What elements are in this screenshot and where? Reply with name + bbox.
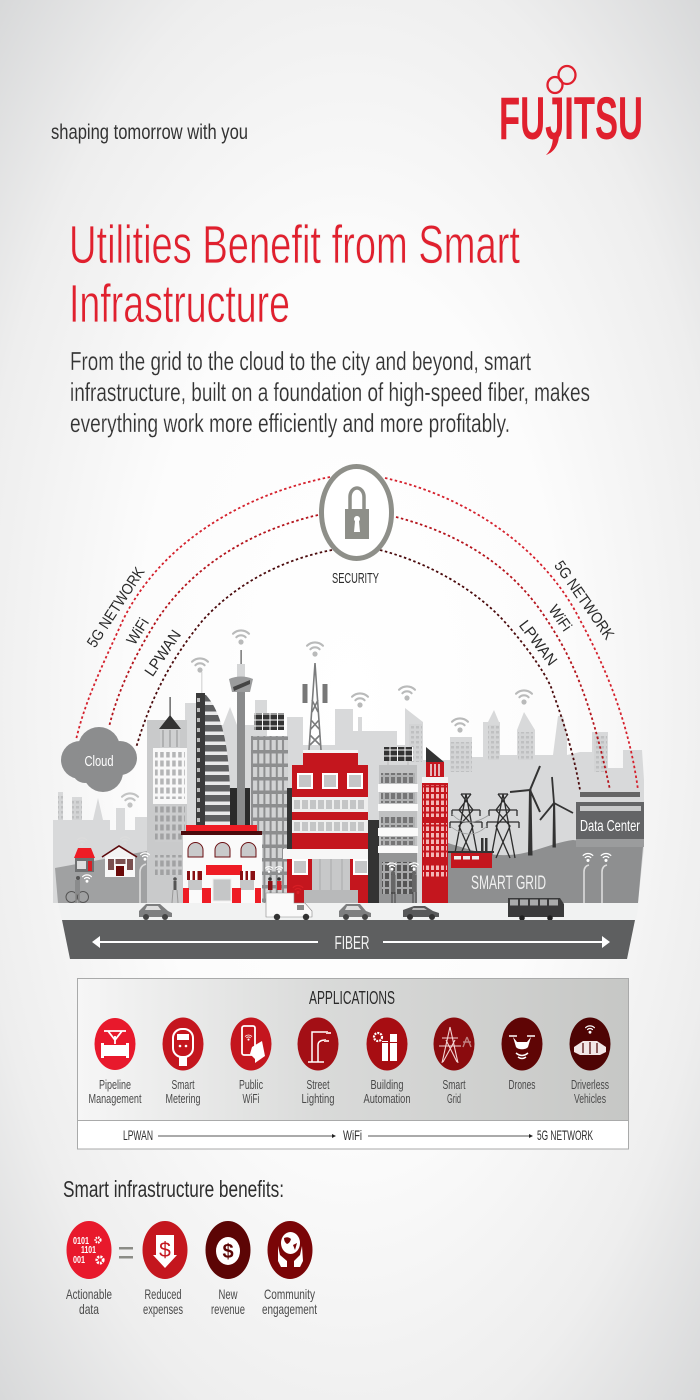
solar panel roof [254,713,284,730]
arc labels [84,558,617,680]
arc labels: WiFi [545,602,575,635]
balcony building [378,747,418,903]
application: public wifi: WiFi [242,1091,260,1106]
white house [102,846,137,877]
application: pipeline management: Management [88,1091,142,1106]
wind turbines [510,766,573,855]
benefit: reduced expenses: $ [159,1239,171,1262]
LPWAN arc left [136,550,332,748]
benefit: new revenue: revenue [211,1301,245,1317]
title: Infrastructure [69,274,290,334]
benefit: new revenue: New [218,1286,238,1302]
application: smart grid: Smart [442,1077,466,1092]
dark pillar beside red building [287,788,293,858]
logo J tail [546,134,559,155]
red building [283,750,377,903]
van [266,893,312,920]
benefit: community engagement: engagement [262,1301,317,1317]
network progression scale [123,1127,593,1143]
benefit: new revenue: $ [222,1241,234,1263]
benefit: new revenue [206,1221,250,1317]
dark strip [368,820,380,903]
vehicles [139,893,564,921]
benefit: actionable data: Actionable [66,1286,112,1302]
street lamps [140,864,607,903]
smart grid label: SMART GRID [471,873,546,894]
benefit: actionable data [66,1221,112,1317]
application: drones: Drones [508,1077,536,1092]
benefit: reduced expenses [142,1221,188,1317]
application: driverless vehicles: Vehicles [574,1091,606,1106]
panel: applications [78,978,628,1149]
benefit: actionable data: 001 [73,1255,85,1266]
cloud label: Cloud [84,753,114,770]
distant windows [58,724,607,820]
logo infinity mark [548,66,576,93]
benefit: actionable data: data [79,1301,99,1317]
benefit: actionable data: 1101 [81,1245,96,1256]
fiber right arrow [383,936,610,948]
application: smart grid [434,1018,474,1106]
wifi signals [78,630,611,894]
benefit: reduced expenses: Reduced [144,1286,182,1302]
arc labels: 5G NETWORK [84,564,149,651]
application: pipeline management [88,1018,142,1106]
upper windows [298,774,362,788]
network progression scale: LPWAN [123,1127,153,1143]
application: pipeline management: Pipeline [99,1077,131,1092]
curved skyscraper [196,672,250,825]
data center label: Data Center [580,818,640,835]
pedestrians [172,871,416,903]
tall red tower [422,747,448,903]
left hill [55,850,153,903]
5G arc left [76,477,330,740]
car [139,904,172,920]
network progression scale: WiFi [343,1127,362,1143]
intro paragraph: everything work more efficiently and more profitably. [70,408,510,438]
arc labels: LPWAN [142,627,185,680]
Fujitsu logo [499,66,643,155]
application: smart metering [162,1018,204,1106]
benefit: community engagement [262,1221,317,1317]
application: smart grid: Grid [447,1091,461,1106]
application: building automation [364,1018,410,1106]
applications heading: APPLICATIONS [309,988,395,1008]
observation tower [229,650,253,825]
application: public wifi [230,1018,272,1106]
benefit: actionable data: 0101 [73,1236,89,1247]
arc labels: 5G NETWORK [550,558,617,643]
fiber bar [62,920,635,959]
equals sign [119,1247,133,1258]
security badge [322,466,392,587]
arc labels: WiFi [124,615,153,648]
white ledge [283,849,377,859]
application: street lighting [298,1018,338,1106]
application: smart metering: Smart [172,1077,195,1092]
white shop [181,825,262,903]
benefit: community engagement: Community [264,1286,315,1302]
application: driverless vehicles: Driverless [571,1077,609,1092]
arc labels: LPWAN [515,617,560,669]
network arcs [76,477,638,790]
grey tower behind white building [147,720,187,903]
LPWAN arc right [380,550,580,790]
intro paragraph: From the grid to the cloud to the city and beyond, smart [70,346,532,376]
application: smart metering: Metering [166,1091,200,1106]
application: street lighting: Lighting [302,1091,334,1106]
application: driverless vehicles [570,1018,610,1106]
grey office building [251,736,288,906]
data center [576,792,644,847]
red roof house [74,848,95,872]
car [339,904,371,920]
white building with black cap [153,697,187,875]
city illustration [53,630,644,921]
security label: SECURITY [332,570,379,587]
sedan [403,906,439,920]
application: building automation: Automation [364,1091,410,1106]
benefit: reduced expenses: expenses [143,1301,183,1317]
road [58,903,639,920]
application: street lighting: Street [306,1077,330,1092]
tagline: shaping tomorrow with you [51,121,248,144]
network progression scale: 5G NETWORK [537,1127,593,1143]
far skyline [53,700,644,903]
person with bicycle [66,876,88,903]
panel: benefits [66,1221,317,1317]
application: drones [502,1018,542,1092]
application: public wifi: Public [239,1077,263,1092]
fiber left arrow [92,936,318,948]
5G arc right [385,478,638,790]
power pylons [450,794,519,858]
fiber label: FIBER [334,933,370,953]
window bands [292,797,368,812]
factory [448,838,494,868]
bus [508,898,564,921]
title: Utilities Benefit from Smart [69,215,520,275]
WiFi arc left [109,515,318,727]
intro paragraph [70,346,590,438]
padlock icon [345,488,369,539]
benefits heading: Smart infrastructure benefits: [63,1176,284,1202]
application: building automation: Building [370,1077,404,1092]
cloud [61,727,137,792]
WiFi arc right [396,517,610,790]
cell tower [305,663,325,750]
title [69,215,520,334]
ground floor [287,859,372,903]
smart grid hill [448,840,643,903]
